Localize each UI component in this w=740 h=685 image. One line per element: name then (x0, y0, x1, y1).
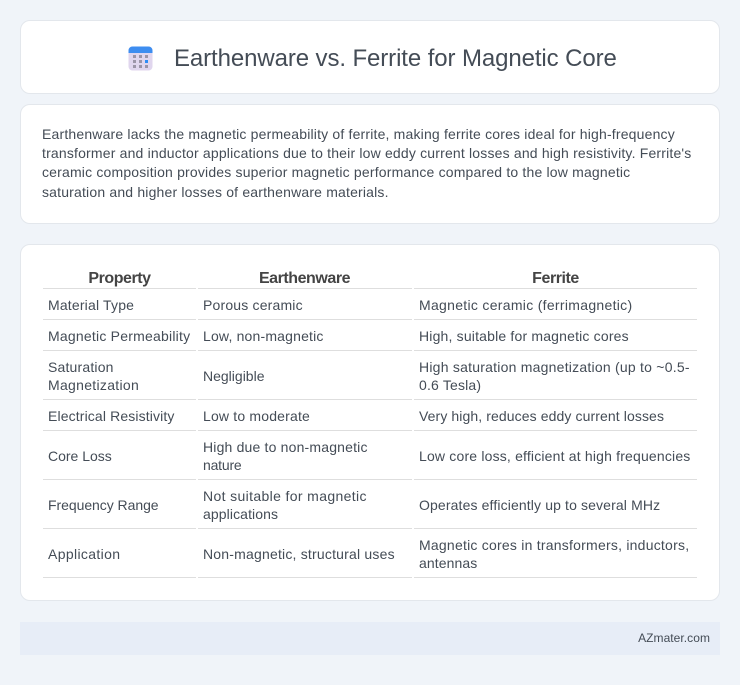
row: frequency range: Not suitable for magnetic (203, 488, 367, 504)
row: core loss: High due to non-magnetic (203, 439, 368, 455)
row: saturation magnetization: 0.6 Tesla) (419, 377, 481, 393)
title: Earthenware vs. Ferrite for Magnetic Core (174, 45, 617, 72)
row: application: antennas (419, 555, 477, 571)
footer text: AZmater.com (638, 631, 710, 645)
row: material type: Porous ceramic (203, 297, 303, 313)
row: saturation magnetization: Negligible (203, 368, 264, 384)
row: electrical resistivity: Electrical Resistivity (48, 408, 175, 424)
row: core loss: nature (203, 457, 242, 473)
row: saturation magnetization: High saturation magnetization (up to ~0.5- (419, 359, 690, 375)
row: frequency range: Operates efficiently up to several MHz (419, 497, 660, 513)
row: magnetic permeability: High, suitable for magnetic cores (419, 328, 629, 344)
text block: summary: transformer and inductor applications due to their low eddy current losses and high resistivity. Ferrite's (42, 145, 691, 161)
text block: summary: Earthenware lacks the magnetic permeability of ferrite, making ferrite cores ideal for high-frequency (42, 126, 675, 142)
footer bar (20, 622, 720, 655)
row: frequency range (43, 488, 697, 529)
row: core loss (43, 439, 697, 480)
row: core loss: Core Loss (48, 448, 112, 464)
table header: Property (88, 270, 151, 287)
panel: comparison table (20, 244, 720, 601)
row: saturation magnetization (43, 359, 697, 400)
text block: summary: ceramic composition provides superior magnetic performance compared to the low magnetic (42, 164, 630, 180)
row: magnetic permeability: Magnetic Permeability (48, 328, 190, 344)
text block: summary (42, 126, 691, 200)
table header (43, 270, 697, 289)
text block: summary: saturation and higher losses of earthenware materials. (42, 184, 389, 200)
row: material type: Material Type (48, 297, 134, 313)
row: frequency range: Frequency Range (48, 497, 159, 513)
row: magnetic permeability (43, 328, 697, 351)
row: core loss: Low core loss, efficient at high frequencies (419, 448, 690, 464)
comparison table (43, 270, 697, 578)
row: saturation magnetization: Magnetization (48, 377, 139, 393)
row: application: Application (48, 546, 120, 562)
row: magnetic permeability: Low, non-magnetic (203, 328, 324, 344)
row: application (43, 537, 697, 578)
row: electrical resistivity (43, 408, 697, 431)
row: electrical resistivity: Low to moderate (203, 408, 310, 424)
row: application: Magnetic cores in transformers, inductors, (419, 537, 689, 553)
row: electrical resistivity: Very high, reduces eddy current losses (419, 408, 664, 424)
row: application: Non-magnetic, structural uses (203, 546, 395, 562)
table header: Ferrite (532, 270, 579, 287)
row: frequency range: applications (203, 506, 278, 522)
panel: summary text (20, 104, 720, 224)
icon: calendar (128, 46, 152, 70)
table header: Earthenware (259, 270, 350, 287)
row: material type: Magnetic ceramic (ferrimagnetic) (419, 297, 632, 313)
panel: title card (20, 20, 720, 94)
row: material type (43, 297, 697, 320)
row: saturation magnetization: Saturation (48, 359, 114, 375)
